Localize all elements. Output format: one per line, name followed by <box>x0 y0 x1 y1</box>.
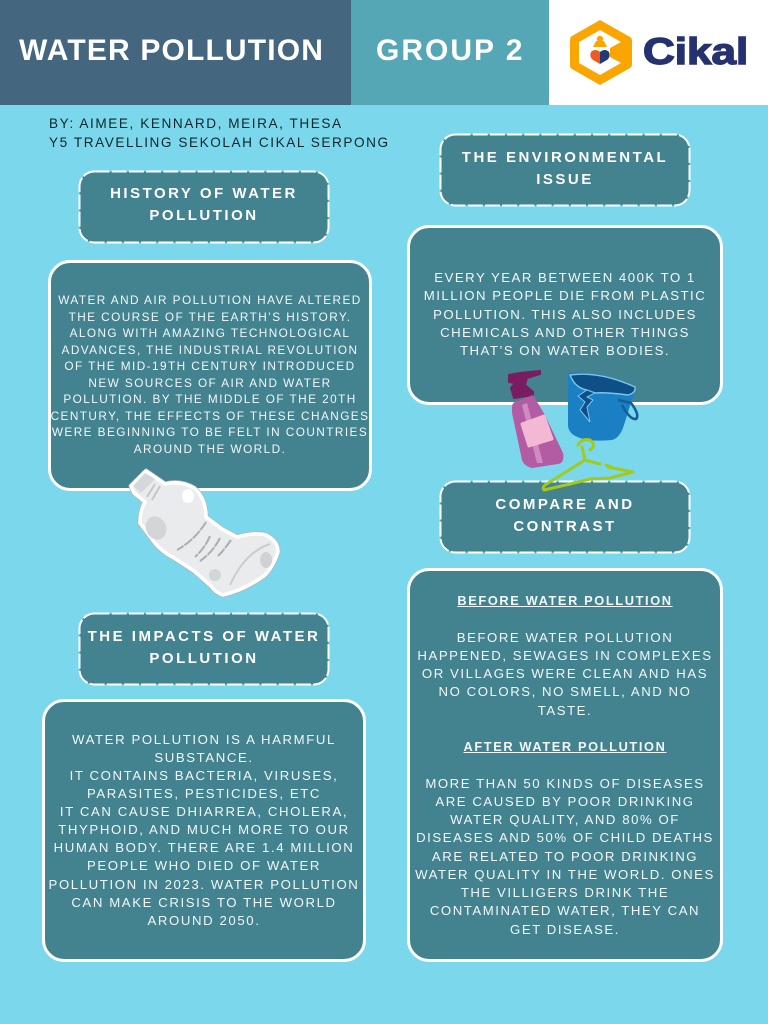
panel: impacts <box>42 699 366 962</box>
heading: history: HISTORY OF WATER <box>110 184 298 202</box>
history text: WERE BEGINNING TO BE FELT IN COUNTRIES <box>52 425 368 439</box>
compare text: THE VILLIGERS DRINK THE <box>461 885 669 900</box>
compare text: WATER QUALITY IN THE WORLD. ONES <box>415 867 715 882</box>
impacts text: IT CAN CAUSE DHIARREA, CHOLERA, <box>60 804 348 819</box>
history text: NEW SOURCES OF AIR AND WATER <box>88 376 332 390</box>
icon: green clothes hanger <box>542 438 634 492</box>
history text: OF THE MID-19TH CENTURY INTRODUCED <box>64 359 356 373</box>
history text: ALONG WITH AMAZING TECHNOLOGICAL <box>70 326 350 340</box>
header band: group <box>351 0 549 105</box>
icon: broken blue bucket <box>568 372 638 441</box>
header band: title <box>0 0 351 105</box>
heading: environmental issue: ISSUE <box>536 170 594 188</box>
heading: compare and contrast: CONTRAST <box>513 518 617 534</box>
history text: CENTURY, THE EFFECTS OF THESE CHANGES <box>51 409 369 423</box>
logo wordmark: Cikal <box>643 31 748 72</box>
compare text: TASTE. <box>538 702 592 718</box>
impacts text: AROUND 2050. <box>147 913 260 928</box>
compare text: NO COLORS, NO SMELL, AND NO <box>439 684 691 699</box>
heading: environmental issue: THE ENVIRONMENTAL <box>462 148 668 166</box>
compare text: BEFORE WATER POLLUTION <box>457 630 673 644</box>
compare text: CONTAMINATED WATER, THEY CAN <box>430 903 700 918</box>
heading: impacts <box>78 612 330 686</box>
compare text: HAPPENED, SEWAGES IN COMPLEXES <box>417 648 713 663</box>
history text: WATER AND AIR POLLUTION HAVE ALTERED <box>58 293 362 307</box>
impacts text: CAN MAKE CRISIS TO THE WORLD <box>71 895 337 910</box>
compare text: WATER QUALITY, AND 80% OF <box>450 812 680 827</box>
impacts text: PARASITES, PESTICIDES, ETC <box>87 786 321 801</box>
environmental text: MILLION PEOPLE DIE FROM PLASTIC <box>424 288 706 303</box>
environmental text: CHEMICALS AND OTHER THINGS <box>440 325 690 340</box>
heading: compare and contrast: COMPARE AND <box>495 496 635 512</box>
icon: Cikal logo hexagon <box>570 20 632 85</box>
authors text: Y5 TRAVELLING SEKOLAH CIKAL SERPONG <box>49 135 390 150</box>
compare text: DISEASES AND 50% OF CHILD DEATHS <box>416 830 714 845</box>
heading: history <box>78 170 330 244</box>
impacts text: HUMAN BODY. THERE ARE 1.4 MILLION <box>54 840 354 855</box>
heading: impacts: THE IMPACTS OF WATER <box>88 628 320 644</box>
compare text: BEFORE WATER POLLUTION <box>457 593 673 608</box>
impacts text: PEOPLE WHO DIED OF WATER <box>87 858 321 873</box>
environmental text: THAT’S ON WATER BODIES. <box>460 343 670 358</box>
authors text <box>49 116 390 150</box>
environmental text: POLLUTION. THIS ALSO INCLUDES <box>433 307 697 322</box>
heading: environmental issue <box>440 134 690 206</box>
history text: AROUND THE WORLD. <box>134 442 286 456</box>
panel: environmental issue <box>407 225 723 405</box>
history text: ADVANCES, THE INDUSTRIAL REVOLUTION <box>62 343 358 357</box>
history text: THE COURSE OF THE EARTH’S HISTORY. <box>69 310 351 324</box>
environmental text: EVERY YEAR BETWEEN 400K TO 1 <box>434 270 696 285</box>
header band: logo <box>549 0 768 105</box>
icon: crushed plastic bottle <box>128 468 280 598</box>
title: WATER POLLUTION <box>19 34 324 67</box>
compare text: GET DISEASE. <box>510 922 620 936</box>
impacts text <box>49 732 359 928</box>
panel: compare and contrast <box>407 568 723 962</box>
heading: compare and contrast <box>440 480 690 554</box>
compare text: ARE RELATED TO POOR DRINKING <box>432 848 698 864</box>
impacts text: POLLUTION IN 2023. WATER POLLUTION <box>49 876 359 892</box>
impacts text: IT CONTAINS BACTERIA, VIRUSES, <box>70 768 338 783</box>
heading: impacts: POLLUTION <box>149 650 259 666</box>
group label: GROUP 2 <box>376 34 524 67</box>
compare text: MORE THAN 50 KINDS OF DISEASES <box>425 776 705 790</box>
compare text <box>415 593 715 936</box>
panel: history <box>48 260 372 491</box>
authors text: BY: AIMEE, KENNARD, MEIRA, THESA <box>49 116 343 131</box>
history text: POLLUTION. BY THE MIDDLE OF THE 20TH <box>63 392 357 406</box>
impacts text: SUBSTANCE. <box>154 750 254 765</box>
compare text: AFTER WATER POLLUTION <box>464 739 666 754</box>
compare text: ARE CAUSED BY POOR DRINKING <box>435 794 695 809</box>
icon: pump bottle <box>508 370 564 468</box>
heading: history: POLLUTION <box>149 206 259 224</box>
history text <box>51 293 369 456</box>
environmental text <box>424 270 706 358</box>
impacts text: THYPHOID, AND MUCH MORE TO OUR <box>58 822 350 837</box>
impacts text: WATER POLLUTION IS A HARMFUL <box>72 732 336 746</box>
compare text: OR VILLAGES WERE CLEAN AND HAS <box>422 666 708 681</box>
